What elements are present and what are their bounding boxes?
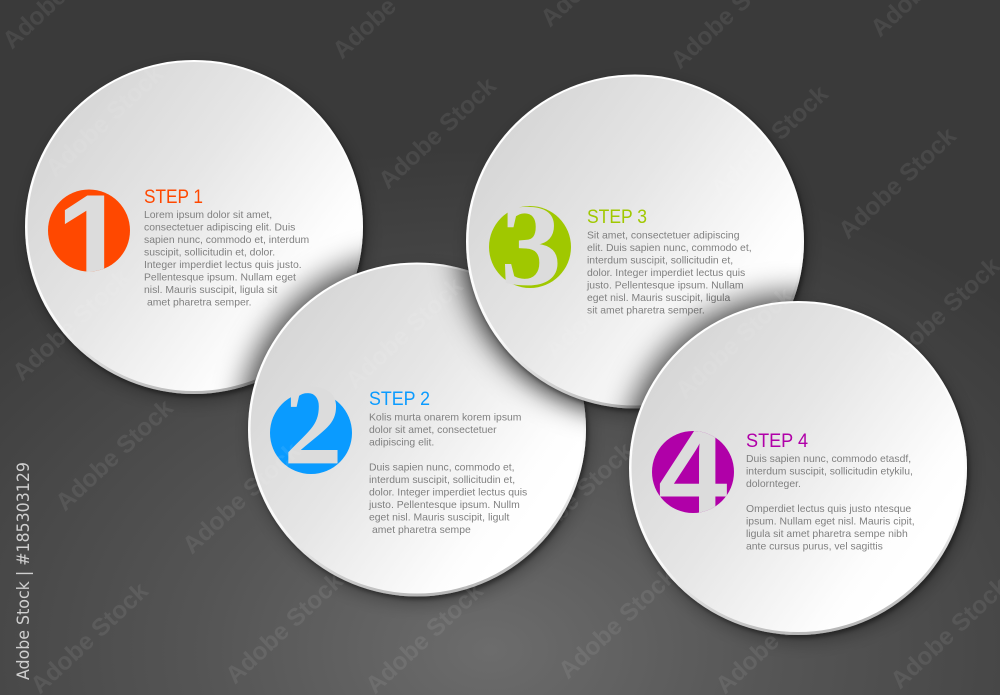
watermarks: Adobe Stock	[706, 80, 834, 202]
step 3 disc	[466, 74, 804, 408]
step 1 text: sapien nunc, commodo et, interdum	[144, 235, 309, 246]
shadow of step 2 on step 1	[222, 240, 362, 391]
step 2 text: justo. Pellentesque ipsum. Nullm	[368, 500, 520, 511]
icon: number 3: 3	[501, 181, 561, 309]
watermarks: Adobe Stock	[511, 437, 639, 559]
watermarks: Adobe Stock	[221, 567, 349, 689]
step 3 text: dolor. Integer imperdiet lectus quis	[587, 268, 745, 279]
step 3 text: Sit amet, consectetuer adipiscing	[587, 230, 740, 242]
step 3 heading: STEP 3	[587, 206, 647, 228]
icon: number 4	[652, 431, 734, 513]
icon: number 4: 4	[658, 402, 728, 541]
shadow of step 4 on step 3	[610, 271, 801, 408]
step 2 text: interdum suscipit, sollicitudin et,	[369, 475, 515, 486]
watermarks: Adobe Stock	[51, 394, 179, 516]
step 2 disc	[248, 262, 586, 596]
step 1 text: Lorem ipsum dolor sit amet,	[144, 210, 272, 221]
step 2 text: Duis sapien nunc, commodo et,	[369, 462, 515, 474]
step 1 heading: STEP 1	[144, 186, 203, 208]
step 2 text: dolor. Integer imperdiet lectus quis	[369, 488, 527, 498]
panel: step 3	[466, 74, 804, 408]
watermarks: Adobe Stock	[841, 454, 969, 576]
panel: step 4	[629, 301, 967, 635]
step 4 text: interdum suscipit, sollicitudin etykilu,	[746, 466, 913, 478]
icon: number 1	[48, 190, 130, 272]
step 2 text: amet pharetra sempe	[372, 525, 471, 536]
step 1 text: suscipit, sollicitudin et, dolor.	[144, 248, 275, 258]
step 3 text: eget nisl. Mauris suscipit, ligula	[587, 293, 730, 304]
watermarks: Adobe Stock	[834, 122, 962, 244]
step 2 text: dolor sit amet, consectetuer	[369, 425, 497, 436]
watermarks: Adobe Stock	[178, 437, 306, 559]
watermarks: Adobe Stock	[8, 264, 136, 386]
step 4 text: Omperdiet lectus quis justo ntesque	[746, 504, 911, 515]
step 1 text: amet pharetra semper.	[147, 298, 252, 308]
panel: step 1	[25, 60, 363, 394]
step 2 heading: STEP 2	[369, 388, 430, 410]
panel: step 2	[248, 262, 586, 596]
step 2 text: eget nisl. Mauris suscipit, ligult	[369, 512, 509, 524]
stock id label: Adobe Stock | #185303129	[14, 462, 33, 680]
watermarks: Adobe Stock	[541, 242, 669, 364]
step 3 text: justo. Pellentesque ipsum. Nullam	[586, 280, 744, 292]
step 4 text: Duis sapien nunc, commodo etasdf,	[746, 454, 911, 465]
watermarks: Adobe Stock	[341, 272, 469, 394]
shadow of step 3 on step 2	[438, 264, 586, 430]
step 4 text: ligula sit amet pharetra sempe nibh	[746, 529, 908, 540]
step 3 text: sit amet pharetra semper.	[587, 306, 705, 316]
step 4 disc	[629, 301, 967, 635]
watermarks: Adobe Stock	[671, 282, 799, 404]
step 4 text: ipsum. Nullam eget nisl. Mauris cipit,	[746, 516, 915, 528]
watermarks: Adobe Stock	[554, 562, 682, 684]
icon: number 2: 2	[284, 361, 342, 488]
step 1 text: consectetuer adipiscing elit. Duis	[144, 222, 295, 234]
step 4 heading: STEP 4	[746, 430, 808, 452]
watermarks: Adobe Stock	[374, 72, 502, 194]
step 4 text: ante cursus purus, vel sagittis	[746, 542, 883, 552]
step 1 disc	[25, 60, 363, 394]
step 2 text: Kolis murta onarem korem ipsum	[369, 412, 521, 424]
step 2 text: adipiscing elit.	[369, 438, 434, 448]
step 1 text: Integer imperdiet lectus quis justo.	[144, 260, 302, 271]
step 3 text: elit. Duis sapien nunc, commodo et,	[587, 243, 752, 254]
step 1 text: nisl. Mauris suscipit, ligula sit	[144, 285, 278, 296]
watermarks: Adobe Stock	[41, 60, 169, 182]
step 1 text: Pellentesque ipsum. Nullam eget	[144, 272, 296, 284]
watermarks: Adobe Stock	[211, 227, 339, 349]
step 3 text: interdum suscipit, sollicitudin et,	[587, 256, 733, 266]
step 4 text: dolornteger.	[746, 479, 801, 490]
icon: number 1: 1	[56, 167, 128, 313]
